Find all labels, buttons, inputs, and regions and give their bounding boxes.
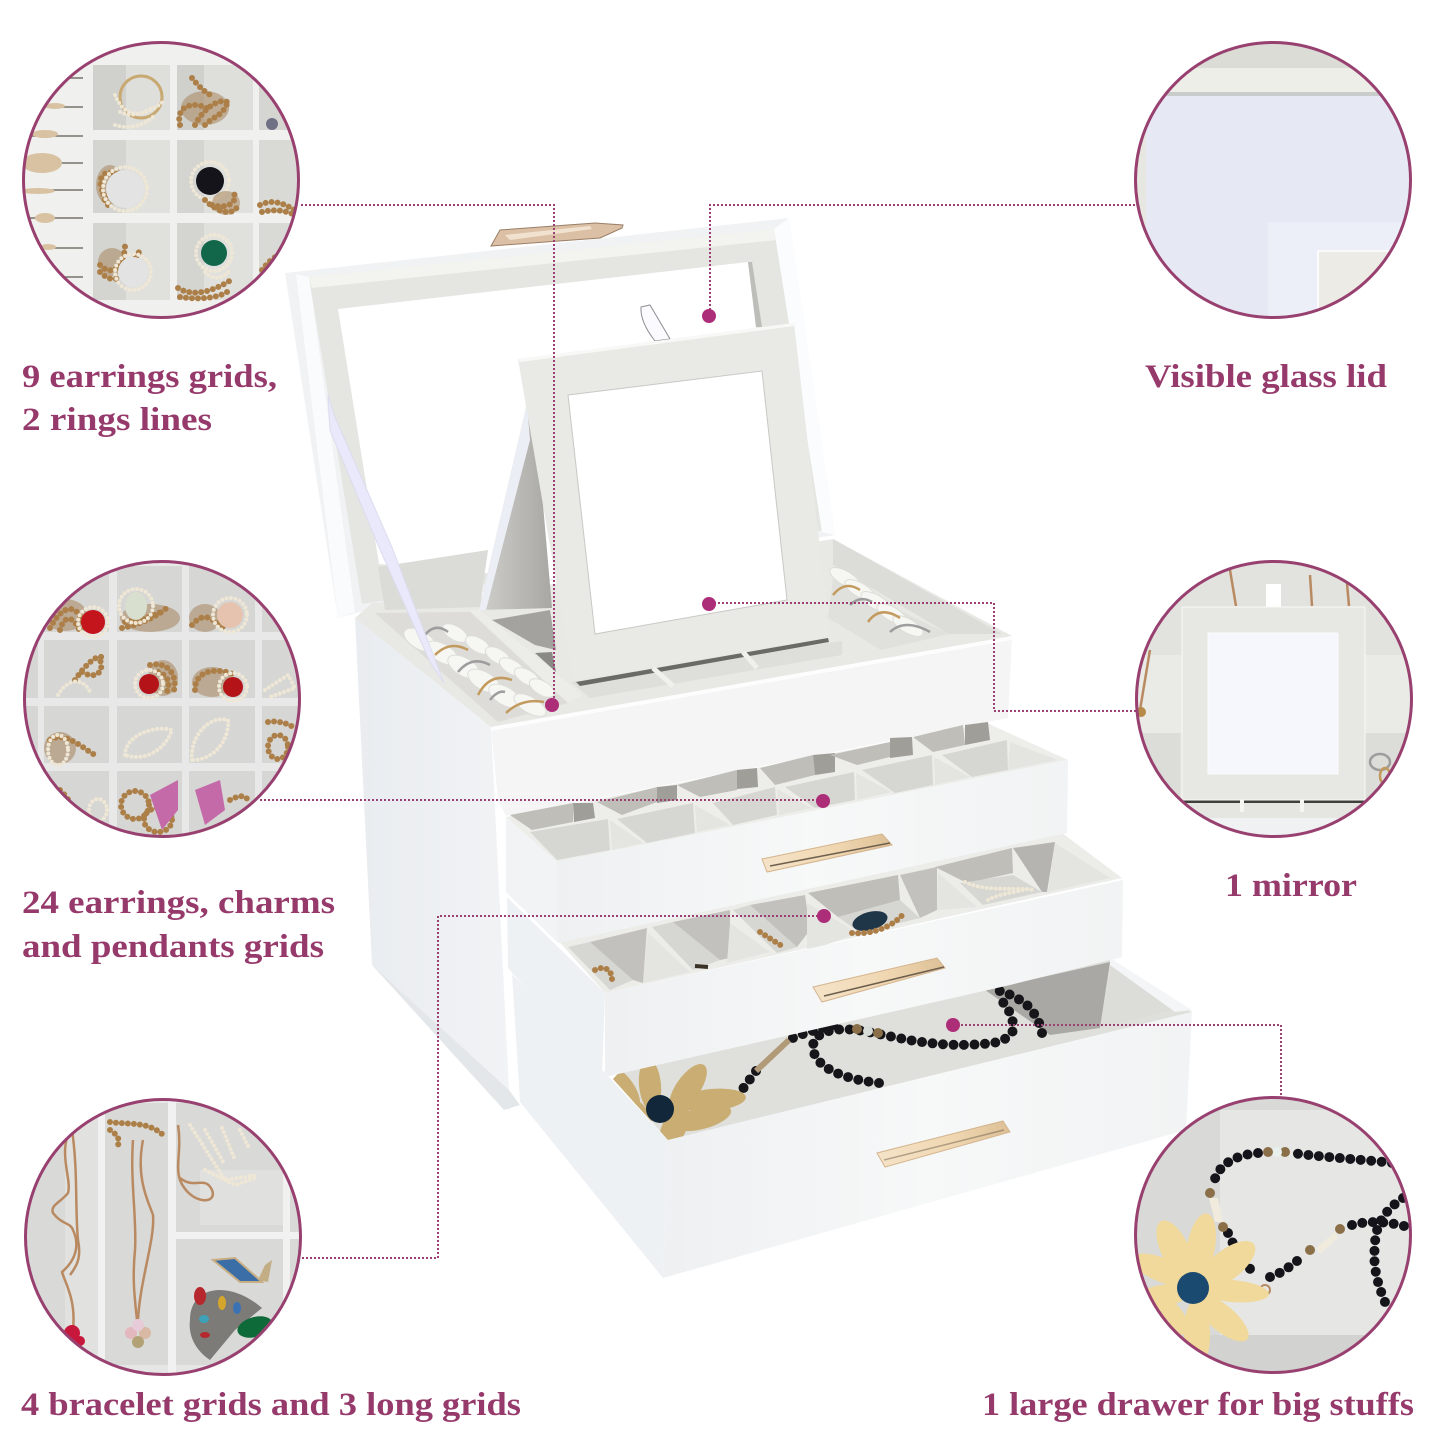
label: large drawer: 1 large drawer for big stuffs <box>982 1387 1414 1423</box>
marker dot: 24 grids <box>816 794 830 808</box>
label: 24 earrings grids: and pendants grids <box>22 929 324 965</box>
compartment 2 <box>652 910 770 970</box>
middle drawer <box>507 830 1123 1077</box>
panel: mirror closeup <box>1130 558 1425 843</box>
drawer front <box>663 1012 1192 1278</box>
label: 24 earrings grids <box>22 885 335 965</box>
panel: glass lid closeup <box>1130 40 1418 331</box>
back row cells <box>510 722 990 830</box>
hanging chains <box>1140 570 1349 710</box>
product: jewelry box <box>285 218 1192 1278</box>
label: visible glass lid: Visible glass lid <box>1145 359 1387 395</box>
rings <box>1370 754 1390 770</box>
base edge <box>372 965 520 1110</box>
callout line: large drawer <box>953 1025 1281 1095</box>
necklace in large drawer <box>602 990 1042 1157</box>
marker dot: mirror <box>702 597 716 611</box>
panel: bracelet grids and long grids closeup <box>20 1095 305 1380</box>
drawer front <box>605 880 1123 1077</box>
left ring roll <box>375 610 582 722</box>
shelf dividers <box>20 558 305 843</box>
mirror tab <box>1266 584 1281 608</box>
front band of box <box>491 637 1012 816</box>
jewelry in compartments <box>595 882 1035 980</box>
black beaded necklace <box>1205 1147 1408 1307</box>
label: 9 earrings grids, 2 rings lines <box>22 359 277 438</box>
callout line: glass lid <box>710 205 1135 316</box>
front slots <box>571 638 842 698</box>
marker dot: rings <box>545 698 559 712</box>
long necklaces <box>52 1122 165 1348</box>
label: 24 earrings grids: 24 earrings, charms <box>22 885 335 921</box>
bottom drawer <box>512 958 1192 1278</box>
panel: 24 earrings grids closeup <box>20 558 305 843</box>
lid clasp <box>491 223 623 246</box>
label: 1 mirror: 1 mirror <box>1225 868 1357 904</box>
ring slots <box>30 77 83 278</box>
callout line: bracelet grids <box>302 916 824 1258</box>
compartment 1 <box>568 928 690 990</box>
corner of frame seen through glass <box>1317 250 1390 308</box>
marker dot: glass lid <box>702 309 716 323</box>
handle <box>813 958 945 1002</box>
grid dividers <box>98 1095 301 1380</box>
marker dot: large drawer <box>946 1018 960 1032</box>
panel: large drawer closeup <box>1128 1092 1420 1385</box>
flower brooch <box>613 1064 746 1140</box>
mirror glass <box>1208 633 1338 774</box>
callout line: 24 grids <box>260 799 823 801</box>
top tray <box>355 539 1012 727</box>
compartment 3 <box>733 895 858 953</box>
front row cells <box>530 740 1058 860</box>
lid support ribbon <box>328 395 444 683</box>
compartment 5 <box>935 842 1110 905</box>
panel: earrings and ring lines closeup <box>20 40 305 325</box>
earrings <box>96 76 298 298</box>
label: bracelet and long grids: 4 bracelet grids and 3 long grids <box>21 1387 521 1423</box>
jewels <box>43 589 295 832</box>
mirror stand back <box>479 404 556 672</box>
callout line: earrings and rings <box>301 205 554 705</box>
right ring roll <box>827 563 949 650</box>
marker dot: bracelet grids <box>817 909 831 923</box>
flower brooch <box>1138 1213 1269 1354</box>
lid with glass window <box>285 218 835 618</box>
mirror <box>518 323 830 680</box>
label: 9 earrings grids, 2 rings lines: 9 earrings grids, <box>22 359 277 395</box>
handle <box>877 1121 1010 1167</box>
brooches <box>178 1125 275 1360</box>
handle <box>762 834 892 872</box>
top drawer <box>506 722 1068 943</box>
tray back wall <box>378 550 488 610</box>
drawer front <box>557 760 1068 943</box>
callout line: mirror <box>709 603 1136 711</box>
mirror frame <box>1182 607 1365 800</box>
mirror tab <box>641 305 670 341</box>
label: 9 earrings grids, 2 rings lines: 2 rings lines <box>22 402 212 438</box>
rings <box>21 103 65 250</box>
box left side <box>355 618 510 1111</box>
compartment 4 <box>808 867 977 933</box>
